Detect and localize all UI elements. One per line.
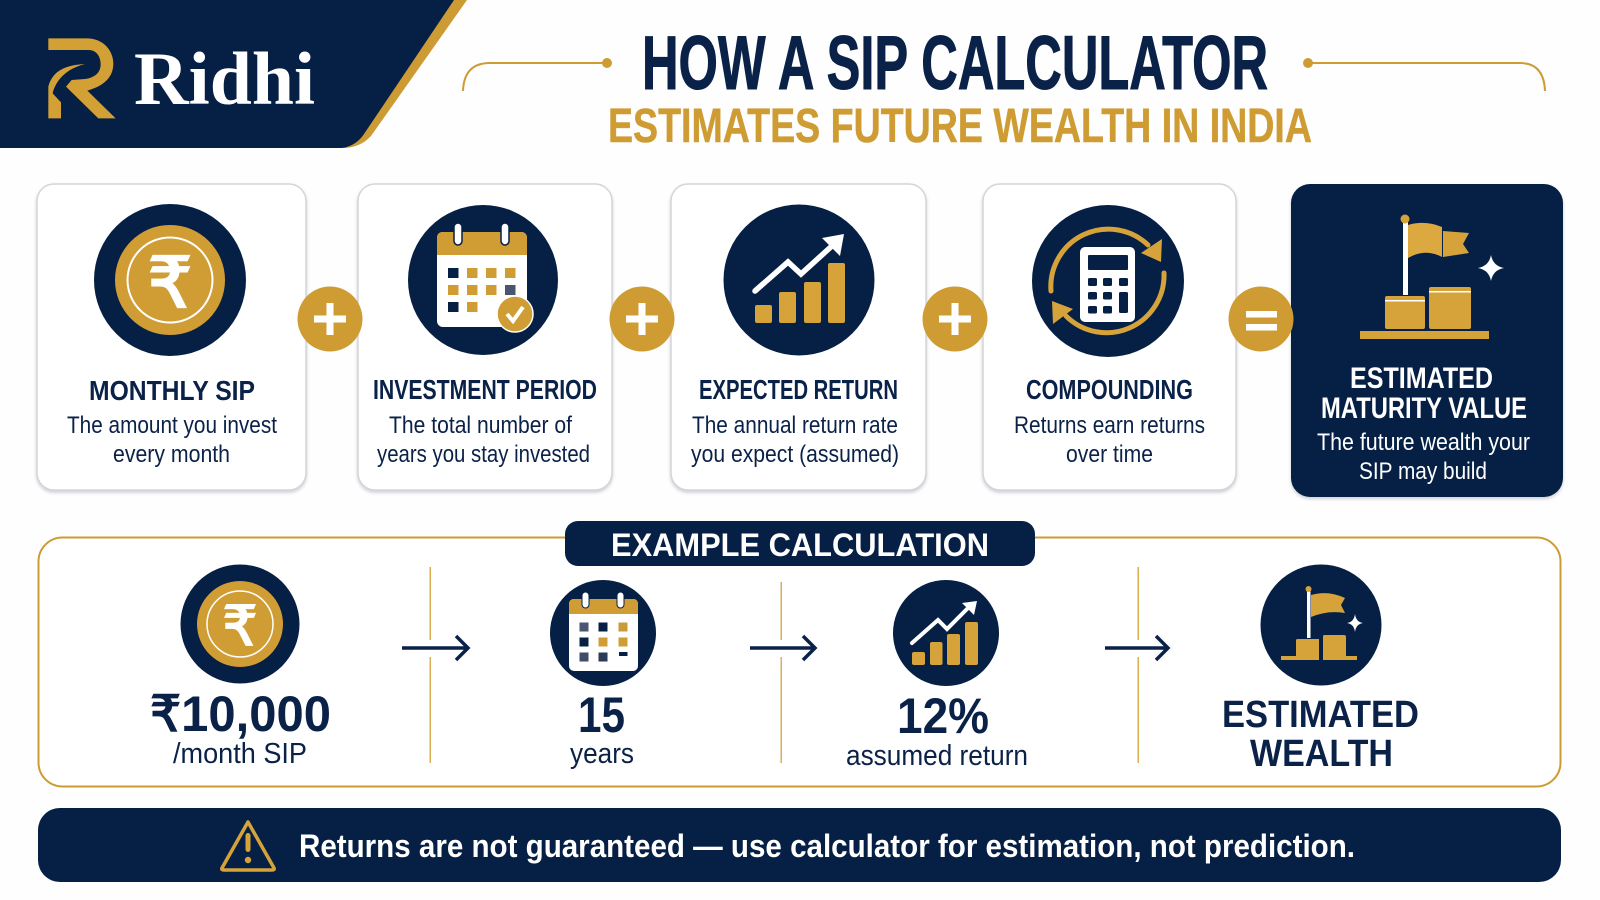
heading: EXPECTED RETURN [699, 374, 898, 405]
value: years: years [570, 738, 634, 770]
icon: growth chart [724, 204, 874, 356]
title: ESTIMATES FUTURE WEALTH IN INDIA [608, 100, 1312, 153]
icon: rupee coin small [180, 564, 300, 684]
value: return rate: assumed return [846, 740, 1028, 772]
description: years you stay invested [377, 441, 590, 468]
title ornament left [463, 58, 612, 91]
panel: expected return [671, 184, 926, 490]
panel: example calculation [38, 521, 1560, 786]
value: years [570, 687, 634, 770]
heading: ESTIMATED [1350, 362, 1493, 395]
logo wordmark: Ridhi [134, 38, 315, 121]
header banner with logo [0, 0, 467, 148]
title: HOW A SIP CALCULATOR [642, 21, 1268, 106]
description: you expect (assumed) [691, 441, 899, 468]
panel: compounding [983, 184, 1236, 490]
description: every month [113, 441, 230, 468]
description [1014, 412, 1205, 468]
value: monthly amount: /month SIP [173, 738, 307, 770]
value: return rate: 12% [897, 688, 989, 744]
description: over time [1066, 441, 1153, 468]
disclaimer bar [38, 808, 1561, 882]
description: Returns earn returns [1014, 412, 1205, 439]
value: return rate [846, 688, 1028, 772]
description [67, 412, 277, 468]
icon: plus operator 1 [298, 286, 362, 352]
description [691, 412, 899, 468]
logo mark [48, 38, 116, 118]
description: The amount you invest [67, 412, 277, 439]
description [1317, 429, 1530, 485]
icon: rupee coin [94, 204, 246, 356]
icon: calendar [408, 205, 558, 355]
arrow 2 [750, 636, 815, 660]
icon: rupee coin: ₹ [148, 244, 192, 322]
icon: warning triangle [222, 822, 274, 870]
value: estimated wealth: ESTIMATED [1222, 694, 1419, 736]
heading: INVESTMENT PERIOD [373, 374, 597, 405]
heading: COMPOUNDING [1026, 374, 1193, 405]
icon: flag small [1260, 564, 1382, 686]
heading: MATURITY VALUE [1321, 392, 1527, 425]
value: years: 15 [578, 687, 625, 743]
value: estimated wealth: WEALTH [1250, 733, 1393, 775]
icon: calendar small [550, 580, 656, 686]
icon: growth chart small [893, 580, 999, 686]
arrow 1 [402, 636, 468, 660]
panel: monthly SIP [37, 184, 306, 490]
value: monthly amount: ₹10,000 [150, 686, 331, 742]
badge: example calculation: EXAMPLE CALCULATION [611, 527, 989, 563]
icon: plus operator 2 [610, 286, 674, 352]
title ornament right [1303, 58, 1545, 91]
icon: calculator with cycle arrows [1032, 205, 1184, 357]
badge: example calculation [565, 521, 1035, 566]
description: The future wealth your [1317, 429, 1530, 456]
heading: MONTHLY SIP [89, 375, 255, 406]
value: estimated wealth [1222, 694, 1419, 775]
description: The total number of [389, 412, 572, 439]
description: SIP may build [1359, 458, 1487, 485]
icon: equals operator [1228, 286, 1294, 352]
icon: rupee coin small: ₹ [222, 595, 258, 657]
icon: flag on podium [1360, 214, 1504, 339]
arrow 3 [1105, 636, 1168, 660]
heading [1321, 362, 1527, 425]
icon: plus operator 3 [922, 286, 988, 352]
description: The annual return rate [692, 412, 898, 439]
title [608, 21, 1312, 153]
panel: investment period [358, 184, 612, 490]
panel: estimated maturity value [1291, 184, 1563, 497]
disclaimer text: Returns are not guaranteed — use calculator for estimation, not prediction. [299, 828, 1355, 864]
description [377, 412, 590, 468]
value: monthly amount [150, 686, 331, 770]
